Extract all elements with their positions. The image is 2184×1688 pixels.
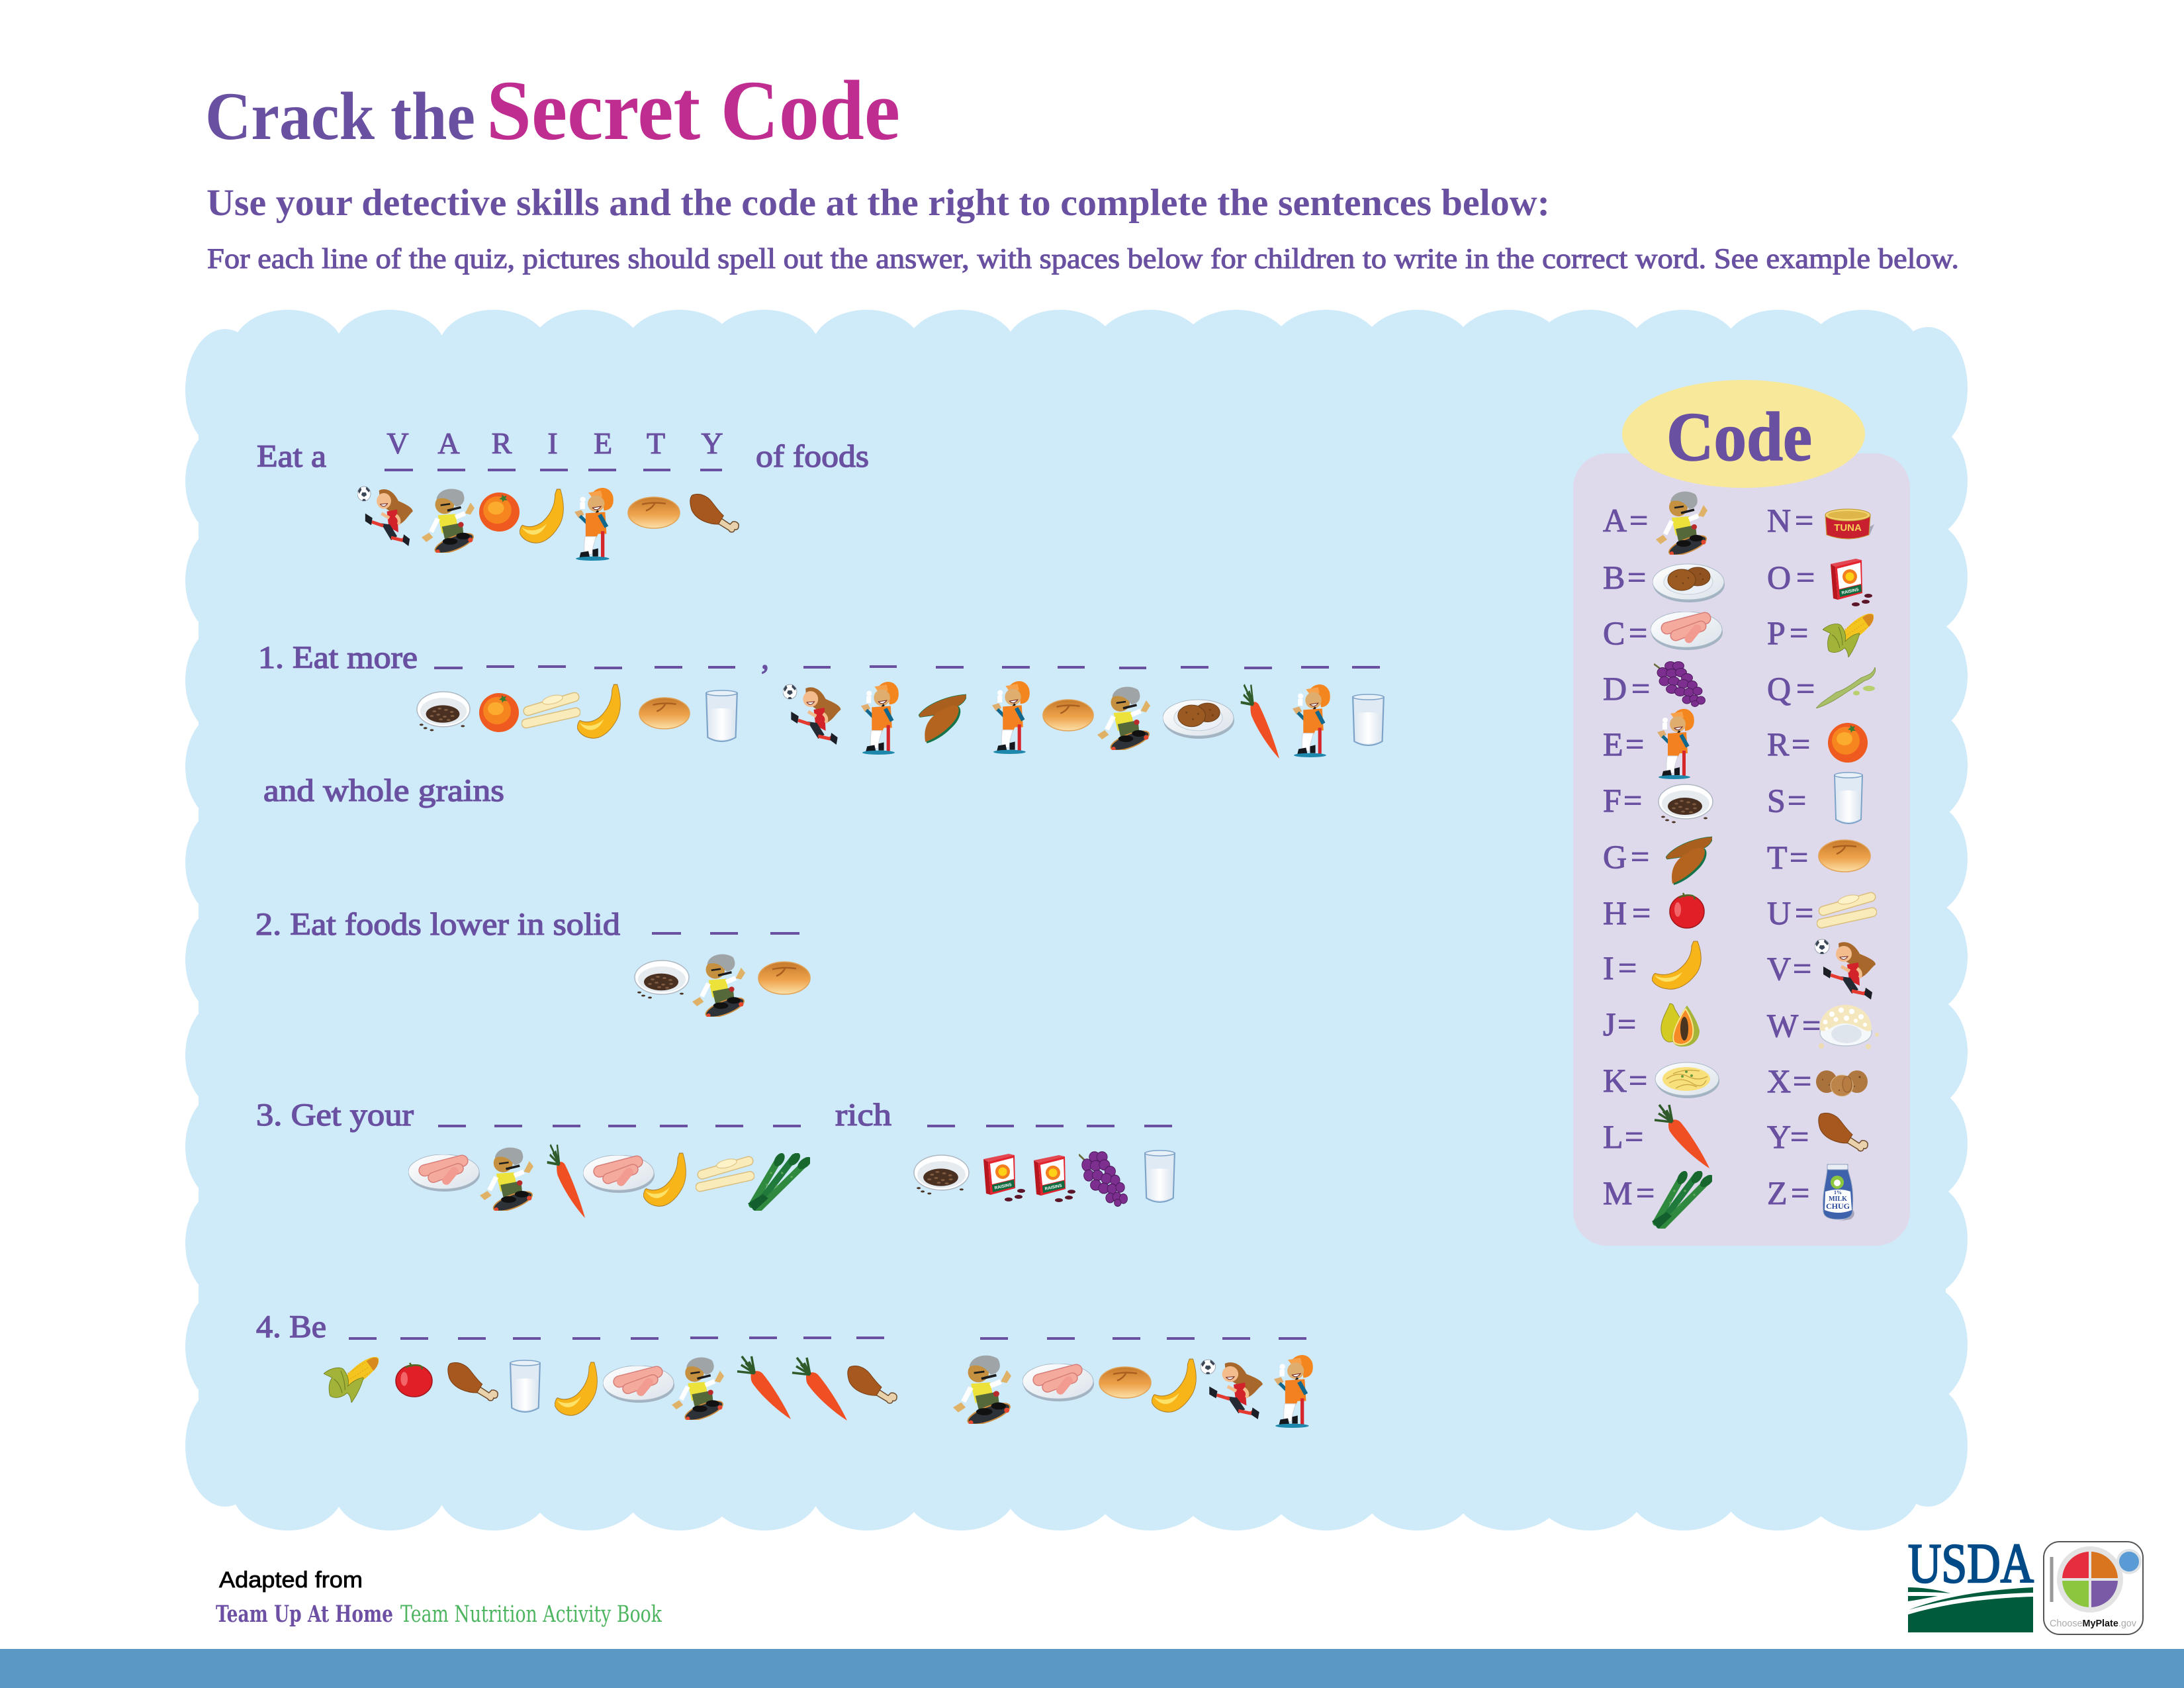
key entry Q <box>1767 667 1876 708</box>
comma: , <box>761 641 769 676</box>
key entry B <box>1603 559 1725 602</box>
code pictures <box>417 681 1384 759</box>
key entry E: E <box>1603 726 1623 763</box>
answer blanks <box>438 1125 1172 1127</box>
key entry K: = <box>1629 1062 1647 1099</box>
key entry X: = <box>1793 1062 1811 1100</box>
key entry H: H <box>1603 894 1627 931</box>
key entry U: U <box>1767 894 1791 931</box>
key entry T: T <box>1767 839 1788 876</box>
key entry R <box>1767 723 1868 763</box>
key entry W <box>1767 1005 1879 1049</box>
key entry V <box>1767 939 1876 1000</box>
key entry L: = <box>1625 1118 1643 1155</box>
key entry V: V <box>1767 950 1791 987</box>
key entry M: M <box>1603 1174 1632 1211</box>
answer letters VARIETY: I <box>547 426 558 460</box>
key entry O: = <box>1796 559 1815 596</box>
answer letters VARIETY: V <box>387 426 409 460</box>
answer letters VARIETY: Y <box>701 426 723 460</box>
key heading: Code <box>1666 398 1812 475</box>
key entry E: = <box>1625 726 1644 763</box>
key entry Z: Z <box>1767 1174 1788 1211</box>
text: 4. Be: 4. Be <box>256 1309 326 1344</box>
key entry F: F <box>1603 782 1621 819</box>
key entry W: W <box>1767 1007 1799 1044</box>
logo text: ChooseMyPlate.gov <box>2050 1618 2136 1629</box>
key entry K <box>1603 1062 1719 1099</box>
key entry I: = <box>1618 949 1637 986</box>
key entry C: = <box>1629 614 1647 651</box>
key entry T: = <box>1790 839 1808 876</box>
quiz line 3 <box>256 1098 1175 1218</box>
key entry U <box>1767 893 1872 931</box>
key entry N <box>1767 502 1874 539</box>
key entry Z: = <box>1791 1174 1809 1211</box>
source credit <box>216 1568 662 1628</box>
key entry Y <box>1767 1113 1868 1155</box>
key entry P <box>1767 609 1878 657</box>
answer letters VARIETY: A <box>437 426 460 460</box>
text: book title: Team Up At Home <box>216 1601 393 1628</box>
key entry B: = <box>1627 559 1646 596</box>
key entry D <box>1603 662 1705 707</box>
key entry A: = <box>1629 502 1648 539</box>
answer blanks <box>349 1336 1306 1340</box>
key background <box>1573 453 1910 1246</box>
text: of foods: of foods <box>756 439 869 474</box>
panel: scalloped blue quiz background <box>185 310 1968 1530</box>
key entry D: = <box>1631 670 1650 707</box>
key entry S <box>1767 773 1862 823</box>
key entry Q: Q <box>1767 670 1791 707</box>
key entry G: G <box>1603 838 1627 875</box>
code pictures <box>324 1352 1313 1429</box>
key entry W: = <box>1802 1007 1821 1044</box>
example sentence <box>257 426 869 561</box>
key entry I: I <box>1603 949 1614 986</box>
key entry H <box>1603 893 1704 931</box>
code pictures <box>357 487 739 561</box>
key entry M: = <box>1636 1174 1655 1211</box>
title <box>205 63 900 158</box>
text: 2. Eat foods lower in solid: 2. Eat foods lower in solid <box>255 907 620 942</box>
key entry L <box>1603 1105 1709 1168</box>
key entry P: = <box>1790 614 1808 651</box>
key entry R: R <box>1767 726 1790 763</box>
key entry G: = <box>1631 838 1649 875</box>
answer blanks <box>434 665 1380 669</box>
code pictures <box>408 1145 1175 1218</box>
key entry X: X <box>1767 1062 1791 1100</box>
answer blanks <box>652 932 799 935</box>
answer letters VARIETY: T <box>647 426 665 460</box>
key entry T <box>1767 839 1870 876</box>
title: Secret Code <box>486 63 900 158</box>
title: Crack the <box>205 79 475 154</box>
key entry O <box>1767 559 1872 606</box>
key entry A <box>1603 492 1709 559</box>
key entry A: A <box>1603 502 1627 539</box>
text: Eat a: Eat a <box>257 439 326 474</box>
key entry N: N <box>1767 502 1791 539</box>
key entry J: J <box>1603 1006 1615 1043</box>
text: 1. Eat more: 1. Eat more <box>258 640 418 675</box>
key entry N: = <box>1795 502 1813 539</box>
answer letters VARIETY: R <box>492 426 512 460</box>
quiz line 2 <box>255 907 810 1021</box>
text: 3. Get your: 3. Get your <box>256 1098 414 1133</box>
bottom blue bar <box>0 1649 2184 1688</box>
key entry M <box>1603 1168 1715 1229</box>
plate <box>2052 1546 2142 1613</box>
key heading oval <box>1622 380 1865 488</box>
text: book subtitle: Team Nutrition Activity Book <box>400 1601 662 1628</box>
key entry Y: = <box>1790 1118 1809 1155</box>
quiz line 1 <box>258 640 1384 808</box>
answer blanks <box>385 469 722 471</box>
key entry F <box>1603 782 1713 823</box>
key entry F: = <box>1623 782 1642 819</box>
key entry D: D <box>1603 670 1627 707</box>
quiz line 4 <box>256 1309 1313 1429</box>
key entry R: = <box>1792 726 1810 763</box>
key entry P: P <box>1767 614 1786 651</box>
key entry Q: = <box>1796 670 1815 707</box>
logo: USDA: USDA <box>1908 1532 2034 1595</box>
key entry U: = <box>1795 894 1813 931</box>
key entry X <box>1767 1062 1868 1100</box>
instructions text: For each line of the quiz, pictures should spell out the answer, with spaces below for children to write in the correct word. See example below. <box>207 244 1959 275</box>
key entry C <box>1603 612 1723 651</box>
key entry S: S <box>1767 782 1786 819</box>
logo: USDA <box>1908 1532 2034 1632</box>
text: rich: rich <box>835 1098 891 1133</box>
key entry V: = <box>1793 950 1811 987</box>
key entry J <box>1603 1004 1700 1047</box>
key entry Z <box>1767 1164 1854 1221</box>
panel: code key <box>1573 380 1910 1246</box>
answer letters VARIETY: E <box>594 426 612 460</box>
key entry B: B <box>1603 559 1625 596</box>
key entry K: K <box>1603 1062 1627 1099</box>
logo: ChooseMyPlate <box>2044 1542 2143 1634</box>
key entry C: C <box>1603 614 1625 651</box>
key entry H: = <box>1632 894 1651 931</box>
key entry I <box>1603 941 1701 989</box>
subtitle: Use your detective skills and the code at the right to complete the sentences below: <box>206 182 1550 224</box>
code pictures <box>635 955 810 1021</box>
key entry Y: Y <box>1767 1118 1791 1155</box>
key entry E <box>1603 709 1694 779</box>
key entry L: L <box>1603 1118 1623 1155</box>
key entry G <box>1603 837 1712 885</box>
text: and whole grains: and whole grains <box>263 773 504 808</box>
key entry O: O <box>1767 559 1791 596</box>
key entry S: = <box>1788 782 1806 819</box>
text: Adapted from: Adapted from <box>219 1568 363 1593</box>
answer letters VARIETY <box>387 426 723 460</box>
key entry J: = <box>1617 1006 1636 1043</box>
